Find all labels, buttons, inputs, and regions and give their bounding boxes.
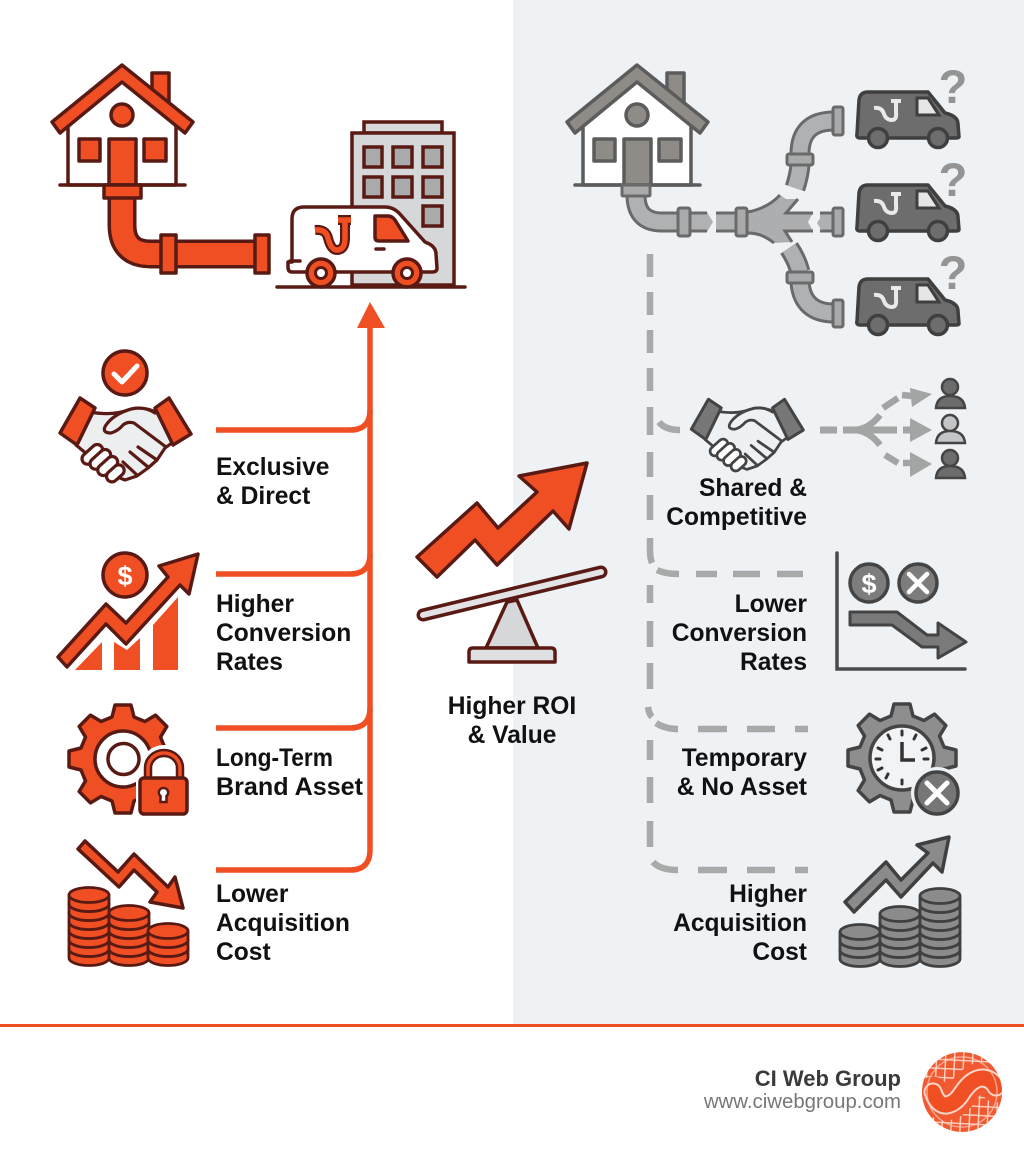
- label: lower acquisition cost: Lower: [216, 881, 288, 908]
- label: lower conversion rates right: Lower: [735, 591, 807, 618]
- icon: declining chart: $: [861, 569, 877, 599]
- label: lower acquisition cost: Acquisition: [216, 910, 350, 937]
- icon: house with direct pipe to van: [52, 65, 269, 273]
- label: higher acquisition cost: Higher: [729, 881, 807, 908]
- label: temporary and no asset: Temporary: [682, 745, 807, 772]
- label: shared and competitive: Shared &: [699, 475, 807, 502]
- label: temporary and no asset: & No Asset: [677, 774, 807, 801]
- icon: balance with rising arrow: [417, 463, 601, 662]
- footer divider: [0, 1024, 1024, 1027]
- label: higher acquisition cost: Acquisition: [673, 910, 807, 937]
- pipe: [104, 185, 269, 273]
- icon: higher conversion chart: [58, 553, 198, 670]
- icon: gray house: [567, 65, 708, 185]
- label: higher roi and value: Higher ROI: [448, 693, 576, 720]
- icon: question marks: ?: [939, 246, 967, 299]
- icon: shared handshake: [691, 399, 803, 473]
- icon: split arrows to three people: [820, 379, 965, 478]
- icon: three gray vans: [857, 92, 959, 334]
- label: shared and competitive: Competitive: [666, 504, 807, 531]
- label: higher roi and value: & Value: [468, 722, 556, 749]
- label: lower acquisition cost: Cost: [216, 939, 271, 966]
- label: long-term brand asset: Long-Term: [216, 745, 333, 772]
- label: long-term brand asset: [216, 745, 363, 801]
- label: higher conversion rates: Rates: [216, 649, 283, 676]
- label: higher conversion rates: Conversion: [216, 620, 351, 647]
- icon: question marks: [939, 60, 967, 299]
- label: lower conversion rates right: Conversion: [672, 620, 807, 647]
- footer brand name: CI Web Group: [755, 1066, 901, 1091]
- icon: office building and van: [277, 122, 465, 287]
- icon: main arrow collecting benefits: [216, 302, 385, 870]
- label: higher acquisition cost: Cost: [752, 939, 807, 966]
- icon: fragmented gray pipes: [622, 107, 843, 327]
- icon: company logo: [922, 1052, 1002, 1132]
- icon: higher conversion chart: $: [117, 561, 133, 591]
- icon: question marks: ?: [939, 153, 967, 206]
- panel: shared leads background: [513, 0, 1024, 1024]
- label: higher conversion rates: Higher: [216, 591, 294, 618]
- icon: gear with padlock: [69, 705, 191, 818]
- footer website: www.ciwebgroup.com: [703, 1091, 901, 1113]
- icon: question marks: ?: [939, 60, 967, 113]
- label: lower conversion rates right: Rates: [740, 649, 807, 676]
- label: exclusive and direct: & Direct: [216, 483, 310, 510]
- icon: coins with rising arrow: [840, 837, 960, 966]
- icon: handshake with check: [60, 351, 191, 484]
- icon: declining chart: [837, 553, 966, 669]
- icon: coins with falling arrow: [69, 841, 188, 966]
- icon: gear with clock and cross: [848, 704, 963, 819]
- label: long-term brand asset: Brand Asset: [216, 774, 363, 801]
- icon: dashed gray connector: [648, 254, 808, 870]
- label: exclusive and direct: Exclusive: [216, 454, 329, 481]
